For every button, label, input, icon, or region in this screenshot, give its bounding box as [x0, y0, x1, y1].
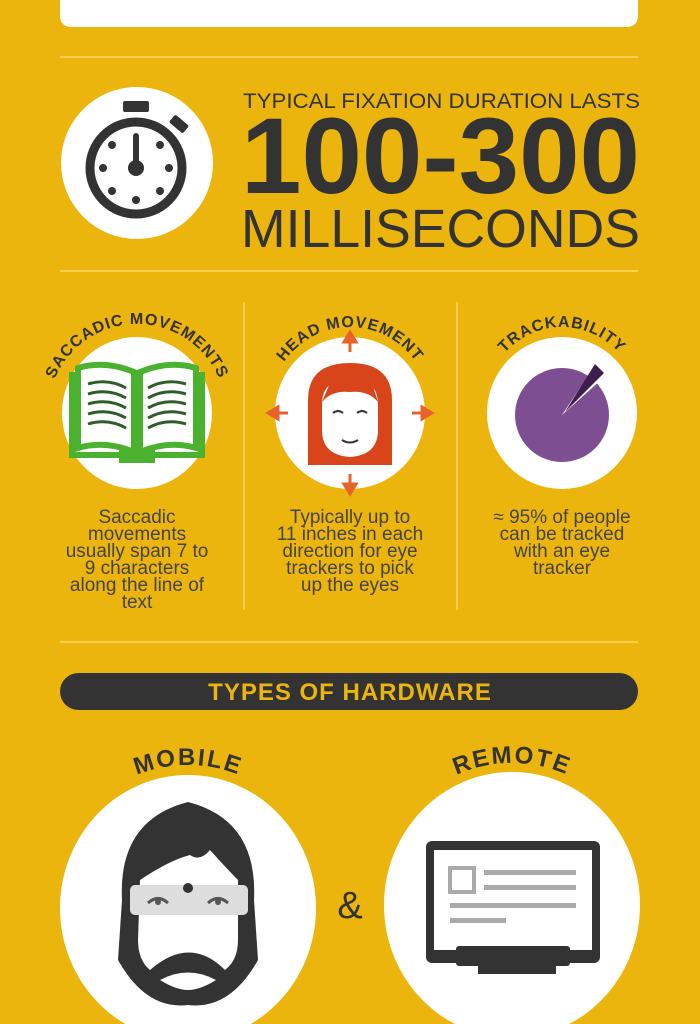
panel: trackability: can be tracked: [500, 524, 624, 545]
icon: book: [72, 365, 202, 460]
icon: man with glasses: [118, 802, 258, 1005]
panel: saccadic movements: [46, 313, 228, 613]
panel: head movement: [265, 316, 435, 596]
panel: trackability: [487, 316, 637, 579]
panel: trackability: ≈ 95% of people: [493, 507, 631, 528]
heading: types of hardware: TYPES OF HARDWARE: [208, 679, 492, 706]
fixation heading: 100-300: [241, 95, 640, 216]
icon: stopwatch: [61, 87, 213, 239]
panel: saccadic movements: usually span 7 to: [66, 541, 208, 562]
heading: types of hardware: [60, 673, 638, 710]
icon: monitor: [426, 841, 600, 974]
panel: head movement: up the eyes: [301, 575, 399, 596]
fixation heading: TYPICAL FIXATION DURATION LASTS: [243, 90, 640, 113]
panel: remote: REMOTE: [452, 746, 570, 774]
panel: remote: [384, 746, 640, 1024]
panel: mobile: [60, 748, 316, 1024]
panel: mobile: MOBILE: [133, 748, 242, 774]
panel: head movement: HEAD MOVEMENT: [276, 316, 424, 362]
icon: arrows: [268, 332, 432, 494]
panel: saccadic movements: Saccadic: [98, 507, 176, 528]
panel: head movement: 11 inches in each: [277, 524, 423, 545]
panel: saccadic movements: SACCADIC MOVEMENTS: [46, 313, 228, 378]
icon: woman face: [308, 363, 392, 465]
ampersand: &: [337, 885, 363, 927]
panel: saccadic movements: text: [122, 592, 153, 613]
panel: saccadic movements: along the line of: [70, 575, 205, 596]
panel: trackability: with an eye: [513, 541, 610, 562]
pie chart 95%: [515, 368, 609, 462]
panel: saccadic movements: 9 characters: [85, 558, 189, 579]
panel: trackability: tracker: [533, 558, 592, 579]
panel: saccadic movements: movements: [88, 524, 186, 545]
panel: head movement: trackers to pick: [286, 558, 414, 579]
top white panel: [60, 0, 638, 27]
panel: trackability: TRACKABILITY: [496, 316, 626, 350]
panel: head movement: Typically up to: [290, 507, 410, 528]
fixation heading: MILLISECONDS: [241, 199, 640, 259]
panel: head movement: direction for eye: [282, 541, 418, 562]
